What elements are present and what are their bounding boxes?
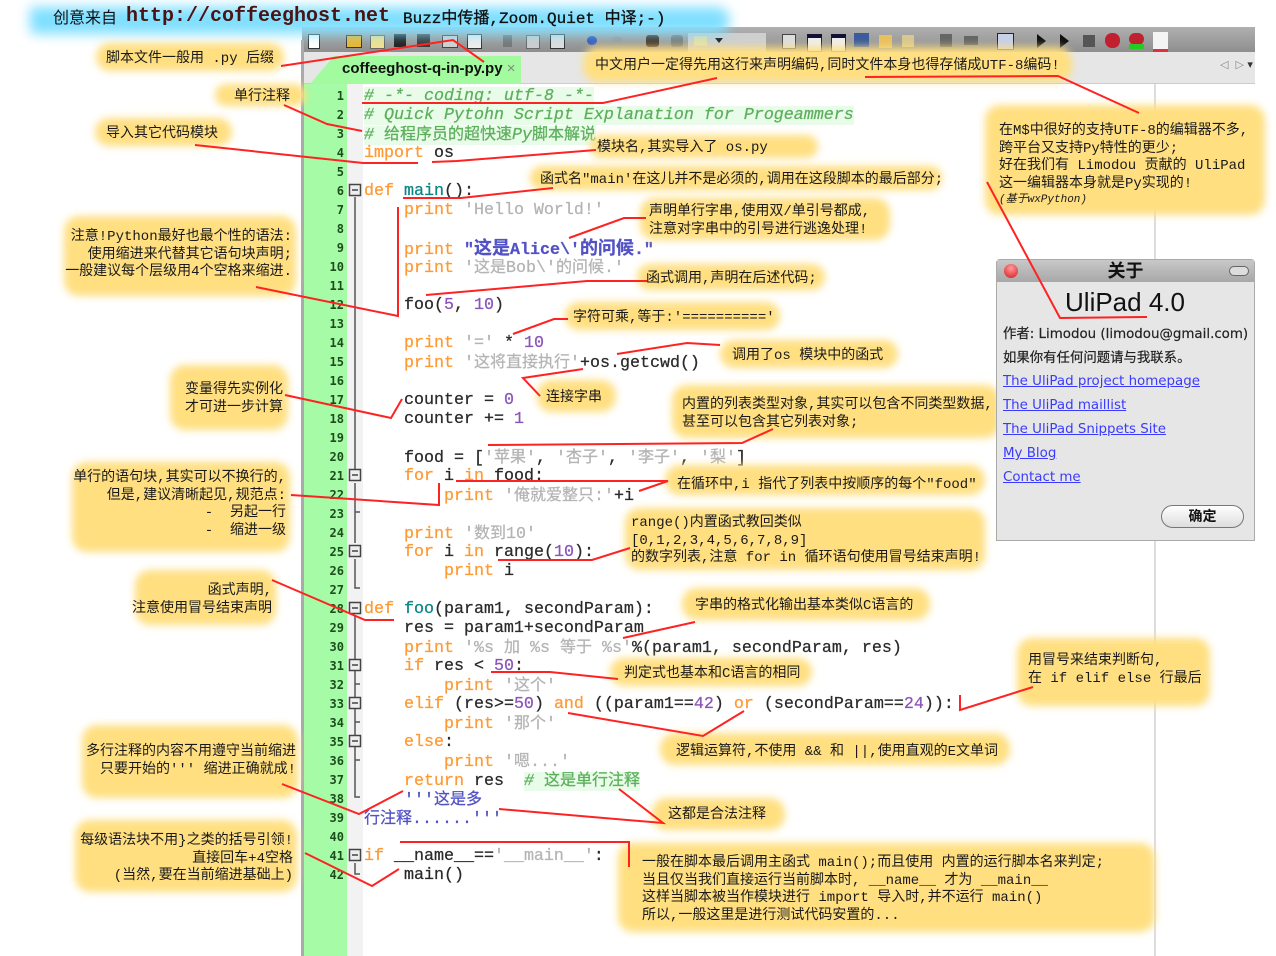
arrow: UTF-8 — [865, 76, 1139, 113]
source code: import os — [364, 144, 454, 163]
source code: else: — [404, 733, 454, 752]
arrow: encoding line — [362, 78, 717, 103]
callout: colon: 在 if elif else 行最后 — [1028, 670, 1202, 686]
callout: os function: 调用了os 模块中的函式 — [732, 348, 883, 364]
author: 作者: Limodou (limodou@gmail.com) — [1003, 327, 1248, 342]
source code: # Quick Pytohn Script Explanation for Progeammers — [364, 106, 854, 125]
arrow: condition — [491, 672, 618, 679]
callout: no braces: (当然,要在当前缩进基础上) — [114, 868, 293, 884]
source code: if res < 50: — [404, 657, 524, 676]
tab scroll arrows: ◁ ▷ ▾ — [1220, 58, 1253, 71]
callout: UTF-8 editors: 好在我们有 Limodou 贡献的 UliPad — [999, 158, 1245, 174]
tab: file name — [310, 56, 521, 84]
source code: counter = 0 — [404, 391, 514, 410]
callout: main guard: 一般在脚本最后调用主函式 main();而且使用 内置的运行脚本名来判定; — [642, 855, 1104, 871]
callout: function declaration — [129, 564, 282, 631]
arrow: string format — [623, 622, 695, 638]
source code: counter += 1 — [404, 410, 524, 429]
callout: string quoting: 注意对字串中的引号进行逃逸处理! — [649, 222, 867, 238]
line numbers: 1 2 3 4 5 6 7 8 9 10 11 12 13 14 15 16 17 18 19 20 21 22 23 24 25 26 27 28 29 30 31 32 33 34 35 36 37 38 39 40 41 42 — [330, 89, 344, 882]
callout: indentation — [58, 210, 301, 302]
source code: # -*- coding: utf-8 -*- — [364, 87, 594, 106]
callout: main guard: 所以,一般这里是进行测试代码安置的... — [642, 908, 900, 924]
source code: print '嗯...' — [444, 753, 570, 772]
title bar — [997, 260, 1254, 282]
arrow: indentation — [256, 207, 398, 316]
callout: single-line block: - 另起一行 — [205, 505, 286, 521]
callout: function call — [632, 258, 830, 296]
source code: res = param1+secondParam — [404, 619, 644, 638]
callout: module name: 模块名,其实导入了 os.py — [597, 140, 768, 156]
source code: print i — [444, 562, 514, 581]
link 3: The UliPad Snippets Site — [1003, 422, 1166, 437]
callout: UTF-8 editors: 在M$中很好的支持UTF-8的编辑器不多, — [999, 123, 1248, 139]
source code: print "这是Alice\'的问候." — [404, 238, 654, 260]
callout: list type: 内置的列表类型对象,其实可以包含不同类型数据, — [682, 397, 993, 413]
callout: legal comments — [646, 792, 790, 836]
callout: string quoting — [634, 192, 896, 246]
callout: variable init: 变量得先实例化 — [185, 382, 283, 398]
arrow: main name — [403, 188, 553, 198]
callout: string format — [676, 582, 936, 626]
callout: single-line block: 单行的语句块,其实可以不换行的, — [73, 470, 286, 486]
arrow: logic operators — [568, 711, 744, 736]
callout: condition — [604, 652, 818, 692]
callout: multi-line comment: 多行注释的内容不用遵守当前缩进 — [86, 744, 296, 760]
callout: string repeat: 字符可乘,等于:'==========' — [573, 310, 775, 326]
callout: string quoting: 声明单行字串,使用双/单引号都成, — [649, 204, 870, 220]
arrow: colon — [960, 687, 1033, 710]
source code: if __name__=='__main__': — [364, 847, 604, 866]
callout: os function — [714, 334, 904, 374]
arrow: string repeat — [513, 319, 568, 334]
source code: def main(): — [364, 182, 474, 201]
callout: indentation: 一般建议每个层级用4个空格来缩进. — [65, 264, 292, 280]
callout: UTF-8 editors: 跨平台又支持Py特性的更少; — [999, 140, 1178, 156]
callout: UTF-8 editors: (基于wxPython) — [999, 194, 1087, 206]
callout: colon: 用冒号来结束判断句, — [1028, 653, 1162, 669]
callout: multi-line comment: 只要开始的''' 缩进正确就成! — [100, 762, 296, 778]
callout: file suffix: 脚本文件一般用 .py 后缀 — [106, 51, 274, 67]
arrow: function declaration — [272, 580, 394, 620]
callout: single-line block: - 缩进一级 — [205, 522, 286, 538]
callout: range: [0,1,2,3,4,5,6,7,8,9] — [631, 532, 807, 548]
callout: single-line block: 但是,建议清晰起见,规范点: — [107, 488, 286, 504]
callout: file suffix — [90, 37, 290, 77]
callout: single-line comment: 单行注释 — [234, 89, 290, 105]
arrow: module name — [432, 150, 596, 162]
source code: '''这是多 — [404, 791, 482, 810]
callout: function declaration: 注意使用冒号结束声明 — [132, 600, 272, 616]
arrow: single-line comment — [284, 105, 362, 131]
callout: string concat — [532, 374, 622, 418]
source code: print '数到10' — [404, 525, 536, 544]
arrow: legal comments — [499, 789, 663, 823]
fold markers — [348, 184, 362, 875]
callout: string format: 字串的格式化输出基本类似C语言的 — [695, 598, 913, 614]
source code: print '这将直接执行'+os.getcwd() — [404, 354, 700, 373]
OK button: 确定 — [1188, 508, 1216, 524]
source code: print 'Hello World!' — [404, 201, 604, 220]
callout: variable init — [164, 359, 294, 436]
fold margin — [347, 84, 363, 956]
source code: main() — [404, 866, 464, 885]
arrow: UliPad — [987, 182, 1147, 318]
callout: logic operators: 逻辑运算符,不使用 && 和 ||,使用直观的E文单词 — [676, 744, 998, 760]
source code: print '%s 加 %s 等于 %s'%(param1, secondParam, res) — [404, 639, 902, 658]
tab label: coffeeghost-q-in-py.py × — [342, 60, 515, 77]
about dialog — [996, 259, 1255, 541]
callout: for loop: 在循环中,i 指代了列表中按顺序的每个"food" — [677, 477, 977, 493]
OK button — [1161, 505, 1244, 528]
arrow: file suffix — [281, 40, 484, 66]
banner: credits: Buzz中传播,Zoom.Quiet 中译;-) — [403, 10, 665, 28]
source code: print '这是Bob\'的问候.' — [404, 259, 624, 278]
callout: string repeat — [560, 296, 786, 336]
tab bar — [302, 52, 1255, 84]
source code: 行注释......''' — [364, 810, 502, 829]
banner: credits — [22, 0, 738, 44]
callout: no braces: 每级语法块不用}之类的括号引领! — [80, 833, 293, 849]
callout: import: 导入其它代码模块 — [106, 126, 218, 142]
arrow: list — [488, 429, 773, 445]
arrow: for loop — [456, 481, 668, 491]
callout: main function: 函式名"main'在这儿并不是必须的,调用在这段脚本的最后部分; — [540, 172, 943, 188]
arrow: range — [498, 548, 630, 560]
callout: string concat: 连接字串 — [546, 390, 602, 406]
arrow: no braces — [305, 853, 399, 886]
source code: # 给程序员的超快速Py脚本解说 — [364, 126, 596, 145]
app title: UliPad 4.0 — [1065, 287, 1185, 317]
left border — [301, 40, 304, 956]
callout: single-line comment — [210, 78, 310, 112]
callout: main guard — [612, 837, 1161, 938]
callout: single-line block — [66, 456, 296, 558]
callout: UTF-8 editors — [979, 99, 1271, 221]
callout: logic operators — [654, 727, 1016, 771]
callout: encoding declaration — [578, 40, 1078, 88]
callout: legal comments: 这都是合法注释 — [668, 807, 766, 823]
banner: credits: 创意来自 — [53, 10, 117, 28]
callout: no braces — [69, 814, 302, 898]
callout: list type — [666, 379, 996, 444]
right margin line — [1154, 84, 1156, 956]
line number gutter — [304, 84, 347, 956]
callout: range: range()内置函式教回类似 — [631, 515, 802, 531]
title bar: 关于 — [1108, 261, 1144, 281]
banner: credits: http://coffeeghost.net — [126, 5, 390, 28]
link 4: My Blog — [1003, 446, 1056, 461]
callout: indentation: 注意!Python最好也最个性的语法: — [71, 229, 292, 245]
link 1: The UliPad project homepage — [1003, 374, 1200, 389]
arrow: import — [195, 145, 418, 163]
arrow: variable — [285, 395, 402, 418]
source code: print '那个' — [444, 715, 556, 734]
callout: main guard: 这样当脚本被当作模块进行 import 导入时,并不运行 main() — [642, 890, 1042, 906]
source code: for i in food: — [404, 467, 544, 486]
callout: no braces: 直接回车+4空格 — [192, 850, 293, 866]
arrow: string quoting — [569, 218, 646, 238]
source code: print '这个' — [444, 677, 556, 696]
source code: def foo(param1, secondParam): — [364, 600, 654, 619]
contact: 如果你有任何问题请与我联系。 — [1003, 351, 1190, 366]
source code: foo(5, 10) — [404, 296, 504, 315]
callout: range: 的数字列表,注意 for in 循环语句使用冒号结束声明! — [631, 550, 981, 566]
arrow: main guard — [400, 842, 629, 867]
callout: module name — [585, 129, 823, 164]
arrow: os function — [617, 343, 720, 354]
callout: multi-line comment — [76, 719, 303, 804]
source code: print '=' * 10 — [404, 334, 544, 353]
minimize pill — [1229, 266, 1249, 276]
close button — [1004, 264, 1018, 278]
arrow: single-line block — [291, 483, 439, 505]
source code: for i in range(10): — [404, 543, 594, 562]
callout: main guard: 当且仅当我们直接运行当前脚本时, __name__ 才为 __main__ — [642, 872, 1048, 888]
callout: list type: 甚至可以包含其它列表对象; — [682, 414, 858, 430]
arrow: string concat — [523, 369, 583, 396]
source code: return res # 这是单行注释 — [404, 772, 640, 791]
arrow: multi-line comment — [282, 784, 403, 814]
callout: UTF-8 editors: 这一编辑器本身就是Py实现的! — [999, 176, 1192, 192]
arrow: function call — [426, 281, 647, 295]
source code: print '俺就爱整只:'+i — [444, 487, 634, 506]
callout: main function — [525, 160, 947, 196]
callout: colon — [1011, 632, 1216, 712]
toolbar — [302, 27, 1255, 52]
link 5: Contact me — [1003, 470, 1081, 485]
callout: function declaration: 函式声明, — [208, 583, 272, 599]
callout: function call: 函式调用,声明在后述代码; — [646, 271, 817, 287]
callout: for loop — [660, 458, 990, 501]
source code: elif (res>=50) and ((param1==42) or (secondParam==24)): — [404, 695, 954, 714]
source code: food = ['苹果', '杏子', '李子', '梨'] — [404, 449, 746, 468]
link 2: The UliPad maillist — [1003, 398, 1126, 413]
callout: import — [90, 112, 238, 152]
callout: indentation: 使用缩进来代替其它语句块声明; — [88, 246, 292, 262]
callout: variable init: 才可进一步计算 — [185, 400, 283, 416]
callout: condition: 判定式也基本和C语言的相同 — [624, 666, 800, 682]
callout: range — [619, 502, 991, 576]
callout: encoding declaration: 中文用户一定得先用这行来声明编码,同时文件本身也得存储成UTF-8编码! — [595, 58, 1060, 74]
